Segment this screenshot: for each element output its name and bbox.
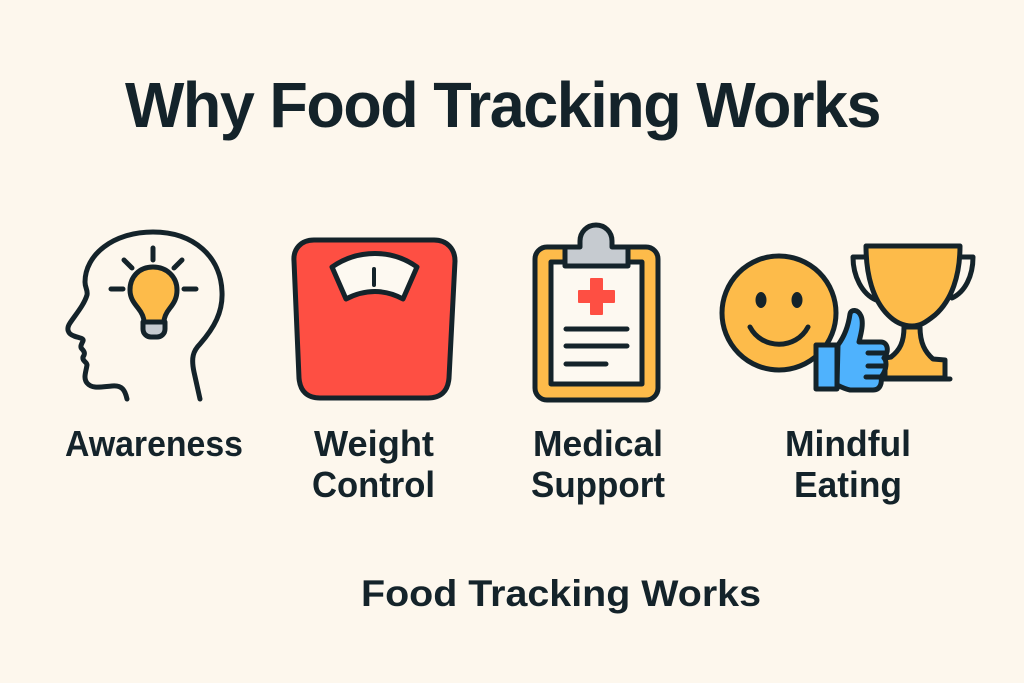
label: Mindful Eating [785,423,911,505]
clip [565,225,628,266]
bulb rays [111,248,196,289]
icon: head with light bulb [68,232,222,399]
label: Weight Control: Control [312,464,435,505]
scale dial [332,254,417,299]
icon: weighing scale [294,240,455,398]
icon: smiley with thumbs up and trophy [722,246,973,390]
thumbs up [816,310,887,390]
footer text: Food Tracking Works [361,573,761,614]
head outline [68,232,222,399]
bulb base [143,322,165,337]
light bulb [130,267,177,322]
paper sheet [551,262,642,384]
label: Medical Support: Medical [533,423,663,464]
label: Weight Control [312,423,435,505]
scale body [294,240,455,398]
label: Awareness: Awareness [65,423,243,464]
label: Weight Control: Weight [314,423,434,464]
dial needle [372,269,376,285]
label: Mindful Eating: Eating [794,464,902,505]
icon: medical clipboard [535,225,658,400]
label: Medical Support: Support [531,464,665,505]
label: Mindful Eating: Mindful [785,423,911,464]
text lines [566,329,627,364]
smiley face [722,256,836,370]
clipboard board [535,247,658,400]
title: Why Food Tracking Works [125,69,880,141]
red cross [579,279,614,314]
label: Medical Support [531,423,665,505]
trophy [853,246,973,379]
